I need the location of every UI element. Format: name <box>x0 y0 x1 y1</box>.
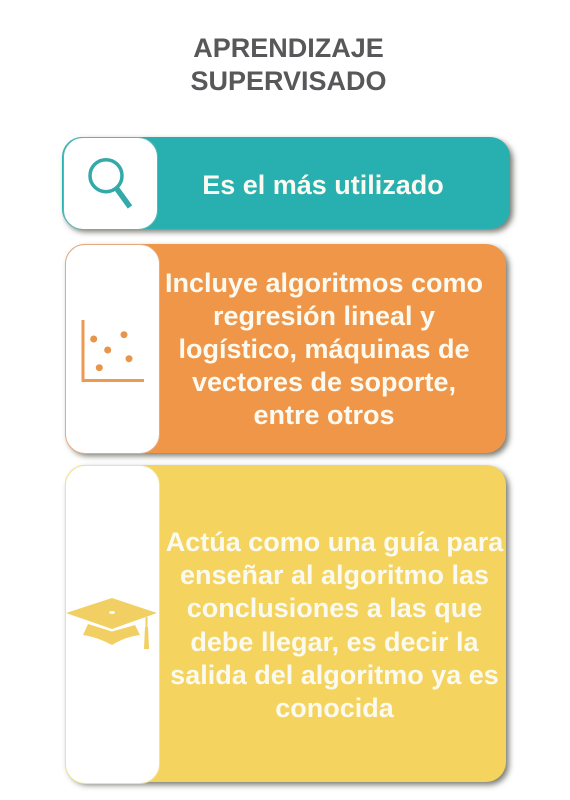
yellow card background <box>65 465 506 782</box>
title: SUPERVISADO <box>190 66 387 96</box>
text: algorithms: Incluye algoritmos como <box>165 268 483 298</box>
text: guide: debe llegar, es decir la <box>190 627 479 657</box>
text: algorithms: regresión lineal y <box>213 301 435 331</box>
text: guide: enseñar al algoritmo las <box>180 560 489 590</box>
panel: most used <box>60 136 518 236</box>
icon tile: magnifier <box>63 137 158 230</box>
text: algorithms <box>165 268 483 430</box>
panel: algorithms <box>64 242 514 460</box>
text: algorithms: vectores de soporte, <box>192 367 456 397</box>
text: guide: conocida <box>275 693 394 723</box>
teal card background <box>62 137 510 229</box>
panel: guide <box>64 464 514 790</box>
orange card background <box>65 244 506 453</box>
text: guide: Actúa como una guía para <box>166 527 503 557</box>
icon: graduation cap <box>66 598 157 649</box>
text: algorithms: logístico, máquinas de <box>178 334 470 364</box>
title: APRENDIZAJE <box>193 33 384 63</box>
text: algorithms: entre otros <box>253 400 395 430</box>
icon tile: scatter plot <box>65 244 160 454</box>
title <box>190 33 387 96</box>
text: guide: salida del algoritmo ya es <box>170 660 499 690</box>
icon: magnifying glass <box>88 158 132 209</box>
icon tile: graduation cap <box>65 465 160 784</box>
icon: scatter chart <box>82 320 144 382</box>
text: most used: Es el más utilizado <box>202 170 444 200</box>
text: guide: conclusiones a las que <box>187 593 482 623</box>
text: guide <box>166 527 504 723</box>
